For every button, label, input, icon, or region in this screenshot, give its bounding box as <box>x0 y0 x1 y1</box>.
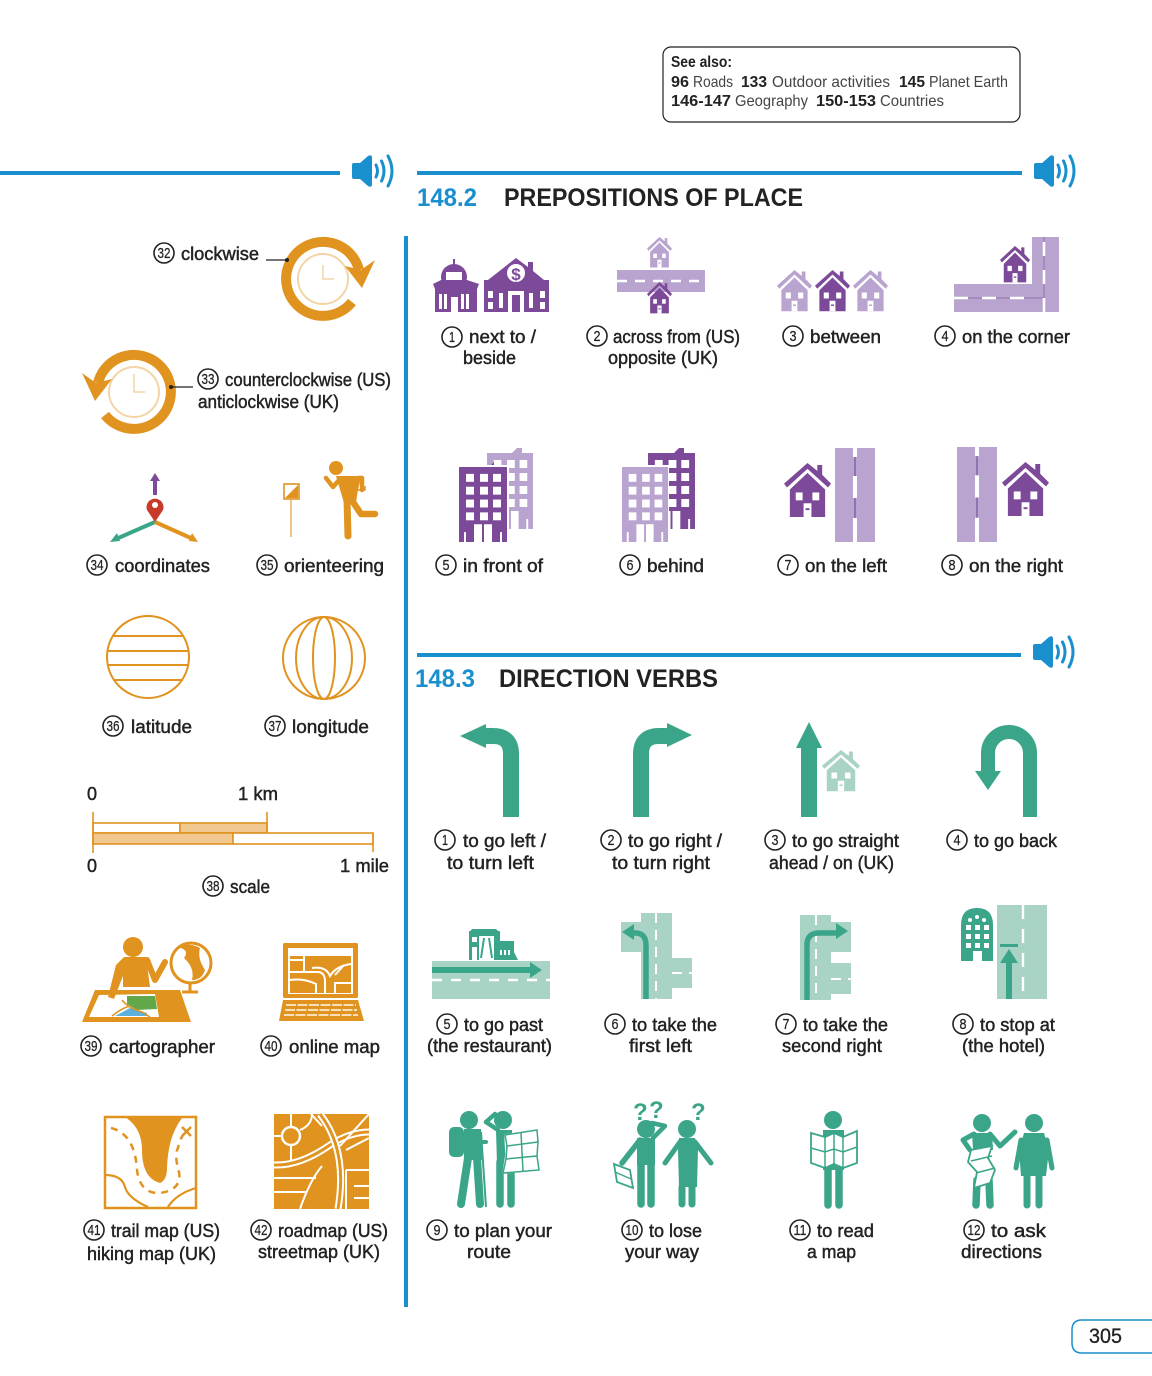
icon: latitude globe <box>107 616 189 698</box>
label <box>103 716 192 737</box>
see also box: Countries <box>880 93 944 110</box>
label: 35 <box>260 557 274 574</box>
label <box>427 1014 552 1056</box>
section rule with audio icon <box>417 636 1073 668</box>
label: second right <box>782 1036 882 1056</box>
item: online map <box>261 943 380 1057</box>
label: 3 <box>790 328 796 345</box>
icon: two confused people: ? <box>691 1099 706 1126</box>
label: across from (US) <box>613 327 740 347</box>
icon: runner and control post <box>284 461 375 537</box>
item: across from <box>587 237 740 368</box>
scale labels: 0 <box>87 856 97 876</box>
label: to turn right <box>612 853 710 873</box>
scale labels: scale <box>230 877 270 897</box>
label: to stop at <box>980 1015 1055 1035</box>
label: coordinates <box>115 556 210 576</box>
heading: PREPOSITIONS OF PLACE <box>504 184 803 212</box>
item: behind <box>620 448 704 576</box>
label: to read <box>817 1221 874 1241</box>
icon: two confused people: ? <box>649 1097 664 1124</box>
icon: left turn arrow <box>460 724 511 817</box>
item: first left <box>605 913 717 1056</box>
label: directions <box>961 1242 1042 1262</box>
item: on the right <box>942 447 1063 576</box>
label <box>778 555 887 576</box>
label: 5 <box>442 557 450 574</box>
label <box>251 1220 388 1262</box>
scale labels <box>87 784 389 897</box>
see also box: 145 <box>899 74 925 91</box>
label <box>622 1220 702 1262</box>
item: second right <box>776 915 888 1056</box>
see also box: 96 <box>671 74 689 91</box>
label: streetmap (UK) <box>258 1242 380 1262</box>
label: 39 <box>84 1038 98 1055</box>
label: 5 <box>444 1016 450 1033</box>
label: 36 <box>106 718 120 735</box>
item: next to <box>433 258 549 368</box>
item: between <box>777 270 888 347</box>
label: 42 <box>254 1222 268 1239</box>
scale labels: 0 <box>87 784 97 804</box>
item: ask directions <box>961 1114 1052 1262</box>
see also box: Planet Earth <box>929 74 1008 91</box>
icon: houses across a road <box>617 237 705 313</box>
label: 12 <box>968 1222 980 1239</box>
scale labels: 1 km <box>238 784 278 804</box>
label: to go past <box>464 1015 543 1035</box>
label: on the left <box>805 556 887 576</box>
icon: right turn arrow <box>641 723 692 817</box>
scale labels: 38 <box>206 878 220 895</box>
item: lose way <box>614 1097 711 1262</box>
label: 9 <box>434 1222 440 1239</box>
label: 8 <box>948 557 956 574</box>
label: 41 <box>88 1222 100 1239</box>
label <box>783 326 881 347</box>
label: 2 <box>594 328 600 345</box>
label: 3 <box>772 832 778 849</box>
icon: house at road corner <box>954 237 1059 312</box>
label: your way <box>625 1242 699 1262</box>
label: behind <box>647 556 704 576</box>
label: 7 <box>784 557 792 574</box>
label <box>776 1014 888 1056</box>
item: counterclockwise <box>82 355 391 429</box>
item: to go back <box>947 732 1058 851</box>
icon: house right of road <box>957 447 1049 542</box>
label <box>265 716 369 737</box>
item: latitude <box>103 616 192 737</box>
icon: two confused people <box>614 1097 711 1204</box>
see also box: 146-147 <box>671 93 731 110</box>
icon: restaurant and road arrow <box>432 929 550 999</box>
label: 4 <box>954 832 960 849</box>
label: orienteering <box>284 556 384 576</box>
see also box <box>663 47 1020 122</box>
icon: two confused people: ? <box>633 1099 648 1126</box>
see also box: Geography <box>735 93 808 110</box>
see also box: See also: <box>671 54 732 71</box>
label: 6 <box>612 1016 618 1033</box>
label: cartographer <box>109 1037 215 1057</box>
item: to go straight <box>765 722 899 873</box>
label: online map <box>289 1037 380 1057</box>
label: on the right <box>969 556 1063 576</box>
icon: longitude globe <box>283 617 365 699</box>
icon: person reading map <box>811 1111 857 1205</box>
label: longitude <box>292 717 369 737</box>
item: on the left <box>778 448 887 576</box>
icon: two hikers with map <box>449 1111 539 1207</box>
icon: dark building in front <box>458 448 533 544</box>
label: to take the <box>632 1015 717 1035</box>
label <box>198 369 391 412</box>
see also box: 150-153 <box>816 93 876 110</box>
item: on the corner <box>935 237 1070 347</box>
label: to go back <box>974 831 1058 851</box>
label: 10 <box>626 1222 638 1239</box>
label: to plan your <box>454 1221 552 1241</box>
left section rule with audio icon <box>0 155 392 187</box>
icon: three houses <box>777 270 888 311</box>
label: to take the <box>803 1015 888 1035</box>
label <box>442 327 536 368</box>
label: in front of <box>463 556 544 576</box>
label: next to / <box>469 327 536 347</box>
icon: roadmap <box>274 1114 369 1209</box>
icon: cartographer at desk with globe <box>82 937 211 1022</box>
label <box>790 1220 874 1262</box>
label <box>587 326 740 368</box>
label: 37 <box>268 718 282 735</box>
page number tab <box>1072 1320 1152 1353</box>
icon: dark building behind <box>621 448 695 544</box>
label: 8 <box>960 1016 966 1033</box>
label: latitude <box>131 717 192 737</box>
label: 1 <box>449 329 455 346</box>
scale labels: 1 mile <box>340 856 389 876</box>
item: scale <box>87 784 389 897</box>
label <box>436 555 544 576</box>
icon: house left of road <box>784 448 875 542</box>
label <box>961 1220 1047 1262</box>
heading: 148.3 <box>415 665 475 693</box>
item: to go past <box>427 929 552 1056</box>
label: 32 <box>158 245 170 262</box>
label: beside <box>463 348 516 368</box>
see also box: 133 <box>741 74 767 91</box>
label <box>84 1220 220 1264</box>
item: stop at hotel <box>953 905 1055 1056</box>
icon: U-turn arrow <box>975 732 1030 817</box>
label <box>765 830 899 873</box>
label: opposite (UK) <box>608 348 718 368</box>
label: first left <box>629 1036 692 1056</box>
icon: second right road arrow <box>800 915 851 1000</box>
label: to go right / <box>628 831 722 851</box>
item: read a map <box>790 1111 874 1262</box>
label: anticlockwise (UK) <box>198 392 339 412</box>
label: (the hotel) <box>962 1036 1045 1056</box>
label: 6 <box>626 557 634 574</box>
label <box>427 1220 552 1262</box>
label: route <box>467 1242 511 1262</box>
label: 7 <box>782 1016 790 1033</box>
label: to lose <box>649 1221 702 1241</box>
label: 4 <box>942 328 948 345</box>
label <box>620 555 704 576</box>
item: plan route <box>427 1111 552 1262</box>
item: trail map <box>84 1117 220 1264</box>
icon: clockwise arrow <box>266 242 375 316</box>
label <box>605 1014 717 1056</box>
label: trail map (US) <box>111 1221 220 1241</box>
label: to go straight <box>792 831 899 851</box>
label: roadmap (US) <box>278 1221 388 1241</box>
item: longitude <box>265 617 369 737</box>
icon: hotel and stop arrow <box>961 905 1047 999</box>
icon: counterclockwise arrow <box>82 355 193 429</box>
item: cartographer <box>81 937 215 1057</box>
label: hiking map (UK) <box>87 1244 216 1264</box>
item: roadmap <box>251 1114 388 1262</box>
icon: laptop with map <box>279 943 364 1021</box>
label: 11 <box>794 1222 806 1239</box>
item: to go left <box>435 724 546 873</box>
item: orienteering <box>257 461 384 576</box>
label: between <box>810 327 881 347</box>
panel: prepositions of place <box>417 155 1074 576</box>
chart: scale bars <box>93 812 373 853</box>
label: 2 <box>608 832 614 849</box>
see also box: Outdoor activities <box>772 74 890 91</box>
label: 34 <box>90 557 104 574</box>
icon: pin with axes <box>110 473 198 542</box>
label: clockwise <box>181 244 259 264</box>
icon: two people asking directions <box>963 1114 1052 1205</box>
heading: DIRECTION VERBS <box>499 665 718 693</box>
label: 1 <box>442 832 448 849</box>
label <box>435 830 546 873</box>
label: 33 <box>202 371 214 388</box>
label <box>154 243 259 264</box>
item: clockwise <box>154 242 375 316</box>
item: in front of <box>436 448 544 576</box>
heading: 148.2 <box>417 184 477 212</box>
label: on the corner <box>962 327 1070 347</box>
label: to go left / <box>463 831 546 851</box>
label: to turn left <box>447 853 534 873</box>
panel: left column map vocabulary <box>81 242 391 1264</box>
label: ahead / on (UK) <box>769 853 894 873</box>
label: a map <box>807 1242 856 1262</box>
label: to ask <box>991 1221 1047 1241</box>
label <box>953 1014 1055 1056</box>
icon: museum beside bank: $ <box>511 265 521 284</box>
page number tab: 305 <box>1089 1325 1122 1348</box>
label: counterclockwise (US) <box>225 370 391 390</box>
label <box>601 830 722 873</box>
item: coordinates <box>87 473 210 576</box>
label: (the restaurant) <box>427 1036 552 1056</box>
heading <box>415 665 718 693</box>
icon: first left road arrow <box>621 913 692 999</box>
see also box: Roads <box>693 74 733 91</box>
icon: straight arrow and house <box>796 722 860 817</box>
vertical divider <box>404 236 408 1307</box>
panel: direction verbs <box>415 636 1073 1262</box>
icon: trail map <box>105 1117 196 1208</box>
section rule with audio icon <box>417 155 1074 187</box>
item: to go right <box>601 723 722 873</box>
label: 40 <box>264 1038 278 1055</box>
